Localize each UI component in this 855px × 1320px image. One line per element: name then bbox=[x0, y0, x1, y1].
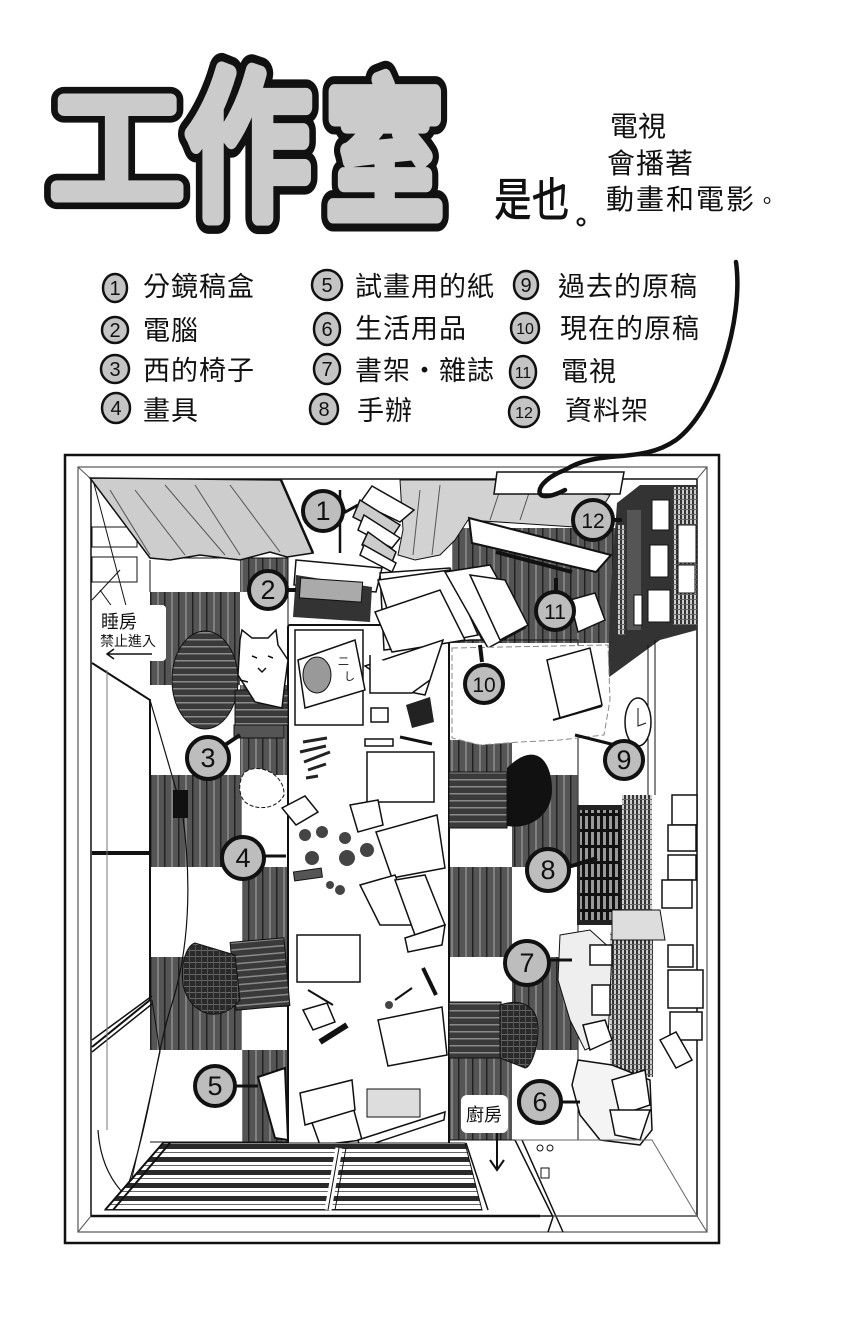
title: 工 bbox=[50, 77, 184, 225]
legend item 5: 5 bbox=[321, 275, 333, 297]
caption: TV note: 動畫和電影。 bbox=[606, 184, 780, 215]
legend item 3: 西的椅子 bbox=[143, 356, 255, 386]
legend item 6: 6 bbox=[321, 319, 333, 341]
floor tiles bbox=[150, 528, 617, 1142]
marker 11: 11 bbox=[544, 601, 566, 624]
sign: bedroom no entry bbox=[98, 605, 166, 661]
magazine pile bbox=[558, 930, 612, 1050]
legend item 9: 過去的原稿 bbox=[558, 272, 698, 302]
balcony slats bbox=[91, 1143, 540, 1216]
legend item 12 bbox=[509, 396, 649, 427]
legend item 8 bbox=[310, 394, 413, 426]
legend item 10: 現在的原稿 bbox=[560, 314, 700, 344]
past manuscripts bbox=[547, 648, 602, 720]
marker 8 bbox=[527, 849, 597, 891]
current manuscripts pile bbox=[365, 565, 528, 695]
sign: kitchen bbox=[461, 1095, 508, 1170]
leader line from TV note to air conditioner bbox=[539, 262, 737, 496]
marker 2 bbox=[249, 571, 296, 609]
legend bbox=[101, 270, 700, 427]
title: 作 bbox=[186, 58, 311, 240]
cat bbox=[238, 630, 288, 708]
legend item 5: 試畫用的紙 bbox=[355, 272, 495, 302]
curtains bbox=[90, 478, 610, 560]
title bbox=[50, 58, 443, 242]
chair: lower right bbox=[449, 1002, 538, 1068]
marker 9: 9 bbox=[616, 745, 632, 775]
legend item 11 bbox=[510, 356, 617, 388]
marker 10: 10 bbox=[472, 674, 496, 697]
marker 12: 12 bbox=[581, 510, 605, 533]
room illustration frame bbox=[65, 455, 719, 1243]
storyboard boxes bbox=[353, 486, 414, 572]
title: 作 bbox=[186, 58, 311, 240]
legend item 12: 12 bbox=[515, 405, 533, 422]
marker 10 bbox=[465, 645, 503, 703]
legend item 9: 9 bbox=[520, 275, 532, 297]
marker 7 bbox=[505, 941, 572, 985]
legend item 1: 分鏡稿盒 bbox=[143, 272, 255, 302]
sign: bedroom no entry: 睡房 bbox=[101, 612, 137, 632]
legend item 12: 資料架 bbox=[565, 396, 649, 426]
legend item 11: 11 bbox=[515, 365, 531, 382]
marker 1: 1 bbox=[315, 496, 331, 526]
legend item 11: 電視 bbox=[561, 357, 617, 387]
title: 室 bbox=[326, 68, 443, 242]
paper stack near TV bbox=[570, 593, 605, 632]
legend item 4: 4 bbox=[110, 398, 122, 420]
air conditioner bbox=[494, 472, 624, 494]
desk bbox=[288, 625, 449, 1148]
marker 2: 2 bbox=[260, 575, 276, 605]
cat drawing sheet: し bbox=[344, 670, 355, 683]
crumpled paper bbox=[240, 769, 284, 808]
legend item 2: 電腦 bbox=[143, 316, 199, 346]
legend item 10: 10 bbox=[516, 321, 534, 338]
legend item 4: 畫具 bbox=[143, 396, 199, 426]
chair: top right bbox=[449, 755, 552, 828]
marker 3: 3 bbox=[200, 743, 216, 773]
marker 9 bbox=[575, 735, 643, 779]
right wall and clock bbox=[625, 640, 655, 795]
marker 7: 7 bbox=[519, 948, 535, 978]
icon: plug bbox=[173, 790, 188, 818]
marker 6 bbox=[519, 1081, 580, 1123]
marker 5 bbox=[195, 1066, 258, 1106]
marker 4 bbox=[222, 837, 286, 879]
marker 12 bbox=[573, 500, 622, 540]
legend item 6 bbox=[314, 313, 467, 345]
sign: kitchen: 廚房 bbox=[466, 1104, 502, 1125]
marker 6: 6 bbox=[532, 1087, 548, 1117]
legend item 8: 手辦 bbox=[357, 396, 413, 426]
marker 3 bbox=[187, 735, 240, 779]
title: 室 bbox=[326, 68, 443, 242]
caption: TV note: 會播著 bbox=[607, 148, 694, 179]
desk items bbox=[282, 697, 447, 1148]
daily goods pile bbox=[572, 1060, 652, 1145]
legend item 2 bbox=[102, 316, 199, 346]
caption: TV note: 電視 bbox=[610, 111, 666, 142]
shelves and figures bbox=[577, 795, 703, 1077]
cat drawing sheet: 二 bbox=[338, 656, 349, 668]
marker 8: 8 bbox=[540, 855, 556, 885]
legend item 1: 1 bbox=[109, 278, 121, 300]
marker 4: 4 bbox=[235, 843, 251, 873]
legend item 7: 7 bbox=[321, 359, 333, 381]
legend item 3: 3 bbox=[109, 359, 121, 381]
legend item 8: 8 bbox=[318, 399, 330, 421]
cat drawing sheet bbox=[295, 630, 365, 725]
marker 11 bbox=[536, 578, 574, 630]
title: 工 bbox=[50, 77, 184, 225]
chair: west's chair bbox=[172, 631, 288, 738]
marker 5: 5 bbox=[207, 1071, 223, 1101]
television bbox=[469, 518, 611, 572]
legend item 6: 生活用品 bbox=[355, 314, 467, 344]
legend item 7: 書架・雜誌 bbox=[355, 356, 495, 386]
laptop bbox=[293, 560, 382, 622]
kitchen doorway bbox=[466, 1140, 697, 1232]
marker 1 bbox=[303, 491, 358, 531]
sign: bedroom no entry: 禁止進入 bbox=[100, 633, 156, 649]
test-drawing papers bbox=[258, 1068, 288, 1140]
caption: TV note bbox=[606, 111, 780, 215]
rug bbox=[452, 645, 610, 745]
subtitle: 是也: 是也 bbox=[494, 174, 569, 226]
data shelf bbox=[608, 485, 697, 678]
legend item 4 bbox=[102, 393, 199, 426]
legend item 2: 2 bbox=[109, 320, 121, 342]
chair: lower left bbox=[182, 938, 290, 1014]
left wall and closet bbox=[92, 480, 188, 1196]
